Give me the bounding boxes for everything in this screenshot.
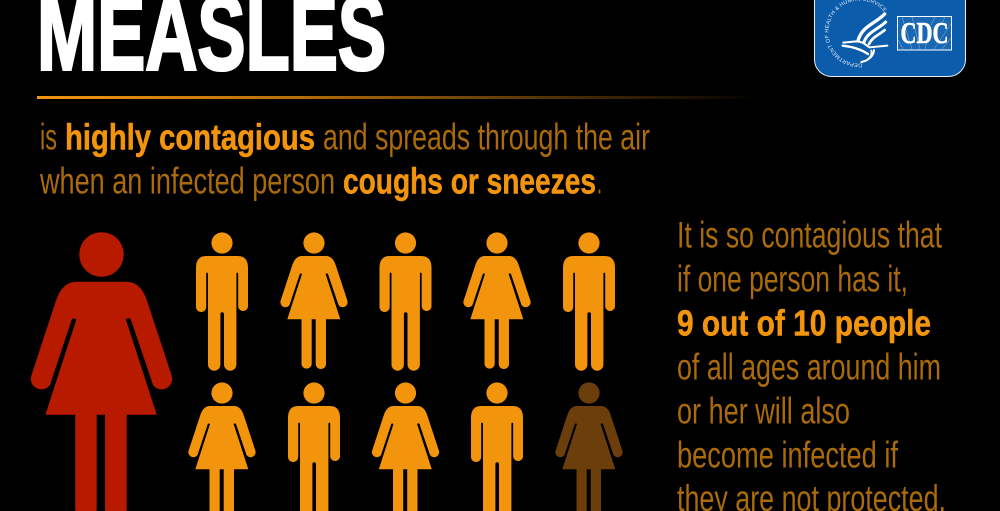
HHS eagle	[843, 14, 887, 62]
row 2	[188, 382, 523, 511]
intro text line 2: when an infected person	[39, 160, 335, 202]
text: .	[597, 160, 602, 202]
row 1	[196, 232, 615, 371]
intro text line 1: is	[40, 116, 57, 158]
uninfected person	[555, 382, 623, 511]
intro text line 1: and spreads through the air	[323, 116, 650, 158]
CDC box	[898, 15, 952, 50]
right text block	[677, 215, 946, 511]
badge background	[814, 0, 966, 76]
intro text line 2: coughs or sneezes	[343, 160, 596, 202]
CDC wordmark: CDC	[900, 15, 948, 50]
divider rule	[37, 96, 760, 99]
right text block: if one person has it,	[677, 259, 908, 300]
right text block: 9 out of 10 people	[677, 302, 931, 344]
CDC logo badge	[814, 0, 966, 77]
intro text line 1: highly contagious	[65, 116, 315, 158]
icon: infected person (large red woman)	[31, 232, 172, 511]
right text block: become infected if	[677, 434, 899, 476]
intro text line 1	[40, 116, 650, 158]
people grid: ten figures, nine orange and one dark	[188, 232, 623, 511]
right text block: or her will also	[677, 390, 850, 432]
